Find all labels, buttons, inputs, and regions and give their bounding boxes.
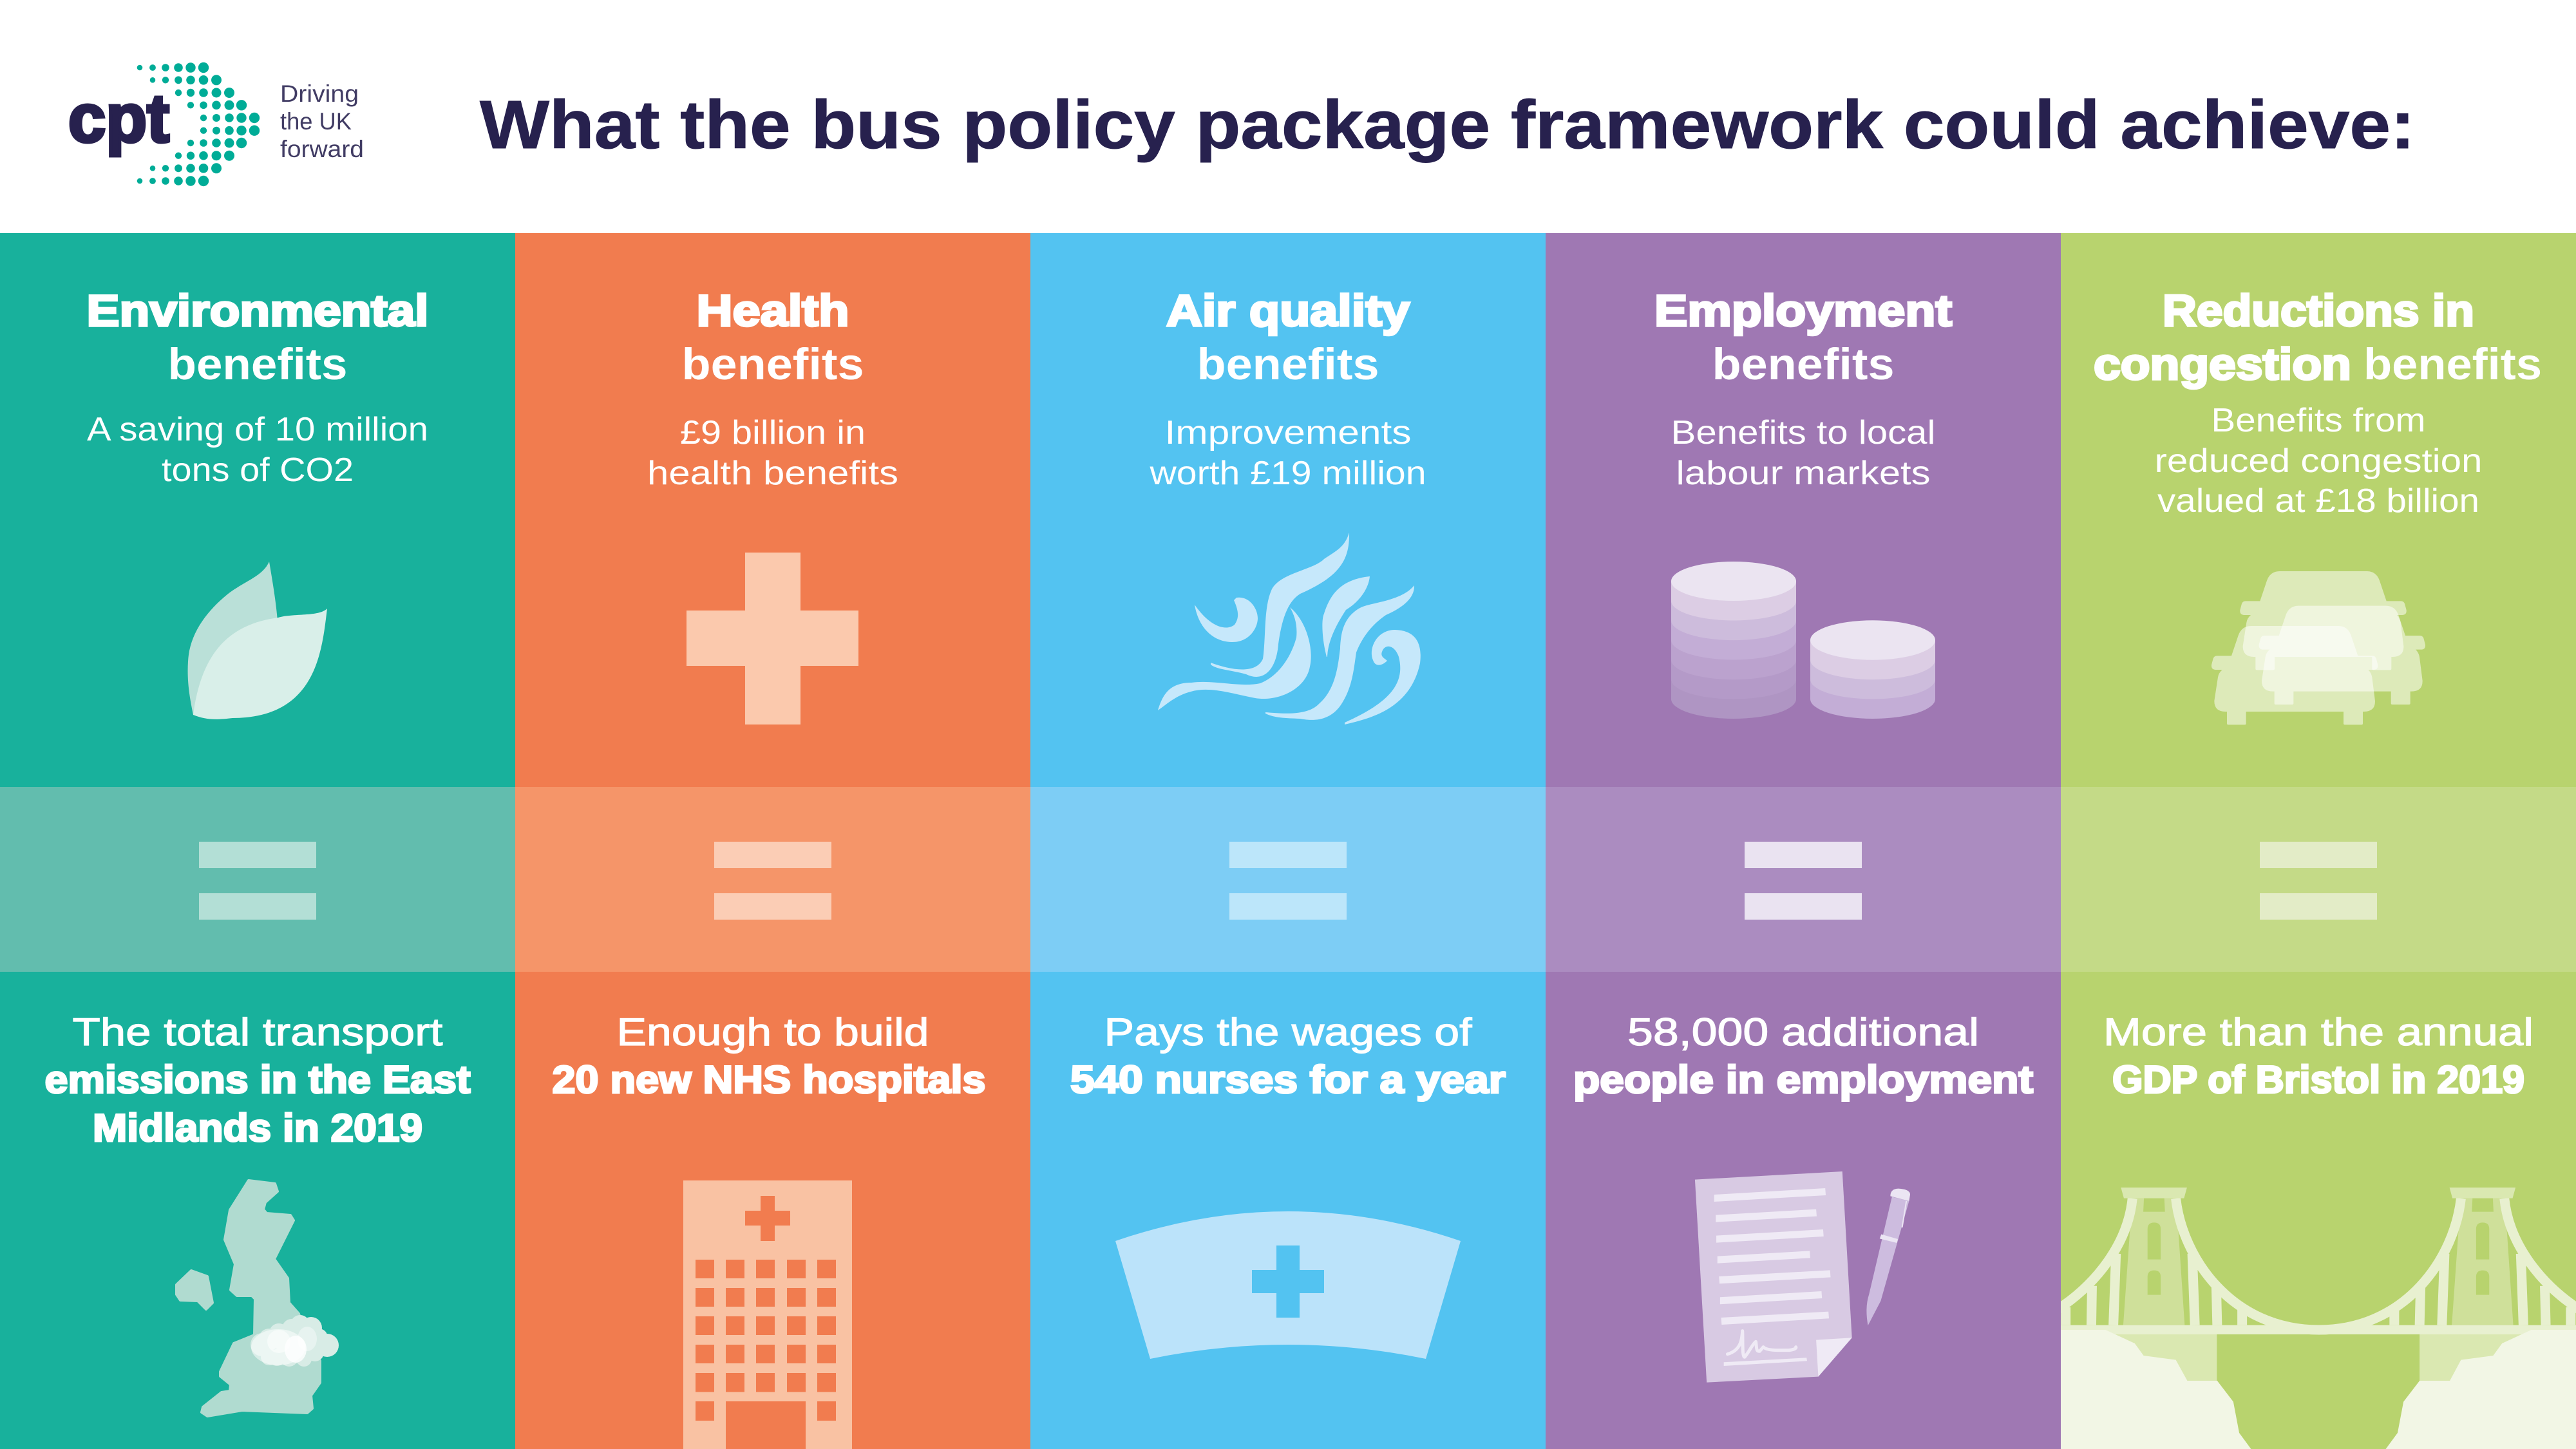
text: Bristol GDP <box>2103 1010 2533 1101</box>
text: health saving: £9 billion in <box>680 414 866 451</box>
logo dotted arrow <box>137 62 260 186</box>
equals band <box>1546 787 2061 972</box>
icon: nurse cap <box>1115 1211 1461 1359</box>
logo wordmark: cpt <box>68 80 169 156</box>
text: additional employment: 58,000 additional <box>1627 1010 1979 1054</box>
text: health saving: health benefits <box>647 455 898 492</box>
heading: employment: benefits <box>1712 339 1895 389</box>
icon: hospital building <box>683 1180 852 1449</box>
text: labour markets <box>1671 414 1936 492</box>
panel: air quality benefits <box>1030 233 1546 1449</box>
text: NHS hospitals <box>553 1010 985 1101</box>
equals band <box>515 787 1030 972</box>
text: nurses wages <box>1070 1010 1506 1101</box>
text: labour markets: Benefits to local <box>1671 414 1936 451</box>
heading: employment: Employment <box>1654 286 1952 336</box>
heading: air quality: benefits <box>1197 339 1379 389</box>
logo strapline <box>280 80 364 162</box>
panel: environmental benefits <box>0 233 515 1449</box>
text: labour markets: labour markets <box>1676 455 1931 492</box>
text: environmental saving: A saving of 10 million <box>87 411 428 448</box>
heading: congestion: Reductions in <box>2163 286 2474 336</box>
text: environmental saving <box>87 411 428 489</box>
text: health saving <box>647 414 898 492</box>
text: nurses wages: 540 nurses for a year <box>1070 1058 1506 1101</box>
heading: congestion <box>2094 286 2542 389</box>
text: reduced congestion value: reduced congestion <box>2155 442 2482 480</box>
text: Bristol GDP: GDP of Bristol in 2019 <box>2112 1058 2524 1101</box>
text: NHS hospitals: Enough to build <box>617 1010 929 1054</box>
text: reduced congestion value <box>2155 402 2482 520</box>
text: transport emissions <box>45 1010 471 1150</box>
heading: air quality: Air quality <box>1166 286 1410 336</box>
heading: health: Health <box>697 286 849 336</box>
logo: cpt <box>68 62 364 186</box>
text: Bristol GDP: More than the annual <box>2103 1010 2533 1054</box>
icon: leaves <box>188 562 327 719</box>
text: additional employment <box>1573 1010 2033 1101</box>
logo strapline: Driving <box>280 80 359 107</box>
icon: signed document and pen <box>1695 1171 1910 1383</box>
panel: employment benefits <box>1546 233 2061 1449</box>
panel: health benefits <box>515 233 1030 1449</box>
text: environmental saving: tons of CO2 <box>162 451 354 489</box>
text: NHS hospitals: 20 new NHS hospitals <box>553 1058 985 1101</box>
text: additional employment: people in employment <box>1573 1058 2033 1101</box>
heading: environmental: benefits <box>167 339 348 389</box>
panel: congestion benefits <box>2058 233 2576 1449</box>
icon: UK map with cloud <box>176 1180 339 1416</box>
logo strapline: forward <box>280 136 364 162</box>
heading: environmental: Environmental <box>86 286 429 336</box>
logo strapline: the UK <box>280 108 352 135</box>
heading: employment <box>1654 286 1952 389</box>
text: reduced congestion value: Benefits from <box>2211 402 2425 439</box>
icon: air swirls <box>1158 533 1421 724</box>
text: transport emissions: Midlands in 2019 <box>93 1106 422 1150</box>
heading: health: benefits <box>681 339 864 389</box>
header <box>0 0 2576 233</box>
text: reduced congestion value: valued at £18 billion <box>2157 482 2479 520</box>
heading: congestion: congestion <box>2094 339 2351 389</box>
icon: medical cross <box>687 553 858 724</box>
heading: air quality <box>1166 286 1410 389</box>
equals band <box>1030 787 1546 972</box>
equals band <box>2061 787 2576 972</box>
text: transport emissions: The total transport <box>72 1010 443 1054</box>
heading: environmental <box>86 286 429 389</box>
icon: coin stacks <box>1671 562 1935 719</box>
text: air quality saving: worth £19 million <box>1149 455 1426 492</box>
text: air quality saving <box>1149 414 1426 492</box>
text: transport emissions: emissions in the East <box>45 1058 471 1101</box>
equals band <box>0 787 515 972</box>
icon: cars in traffic <box>2211 571 2425 724</box>
title: What the bus policy package framework could achieve: <box>480 87 2415 163</box>
icon: Clifton suspension bridge <box>2058 1188 2576 1449</box>
text: air quality saving: Improvements <box>1164 414 1412 451</box>
text: nurses wages: Pays the wages of <box>1104 1010 1472 1054</box>
heading: health <box>681 286 864 389</box>
heading: congestion: benefits <box>2363 339 2542 389</box>
